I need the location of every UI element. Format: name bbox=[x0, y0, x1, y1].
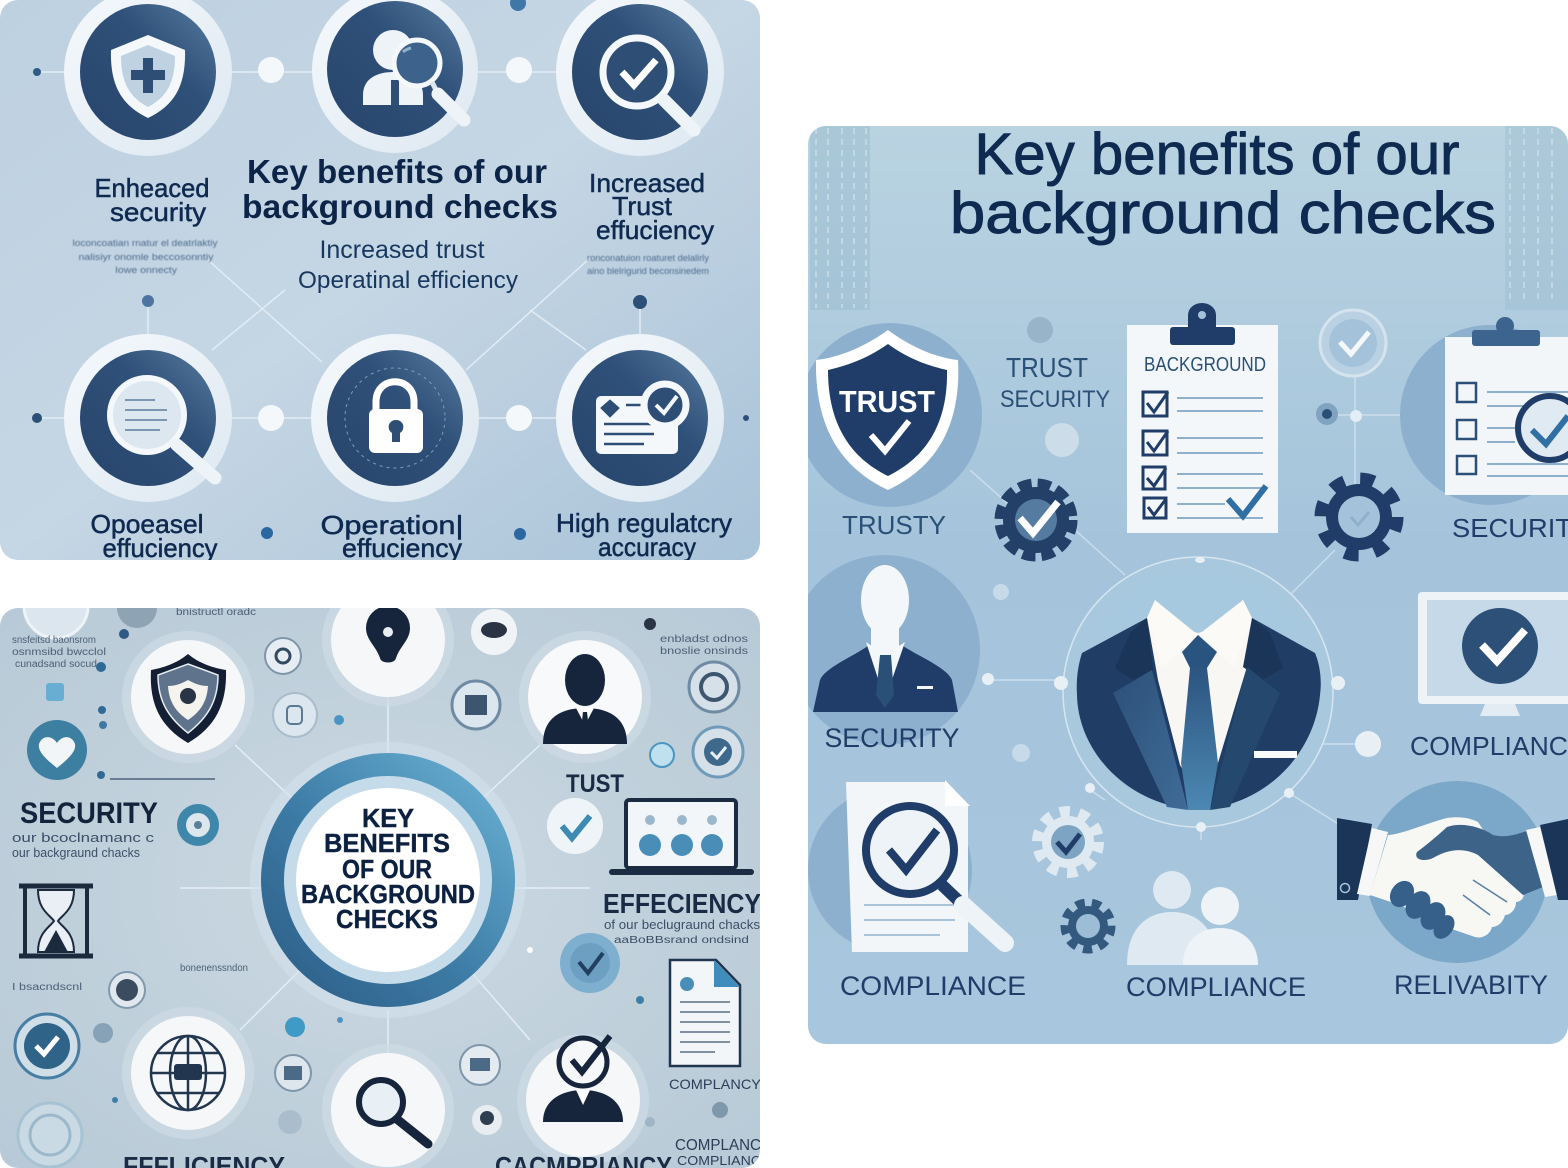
icon: shield badge bbox=[122, 631, 254, 763]
heading: efficiency: EFFECIENCY bbox=[603, 888, 761, 919]
title: key benefits bbox=[950, 122, 1496, 246]
label: operational efficiency middle: effuciency bbox=[342, 533, 462, 563]
icon: nodes bbox=[1316, 403, 1362, 425]
label: compliancy right: COMPLANCY bbox=[669, 1076, 762, 1092]
heading: key benefits bbox=[242, 153, 558, 225]
icon: hourglass bbox=[19, 886, 93, 956]
central hub: key benefits: BACKGROUND bbox=[301, 879, 475, 909]
label: enhanced security bbox=[96, 178, 208, 227]
small text: top captions: osnmsibd bwcclol bbox=[12, 647, 106, 658]
label: compliance right: COMPLIANC bbox=[1410, 731, 1568, 761]
icon: central connector nodes bbox=[982, 557, 1381, 832]
small text: left description: Iowe onnecty bbox=[115, 265, 178, 275]
icon: check bubble bbox=[547, 798, 603, 854]
small text: top captions: snsfeitsd baonsrom bbox=[12, 635, 96, 646]
label: high regulatory accuracy bbox=[558, 512, 732, 560]
icon: light check gear bbox=[1038, 812, 1098, 872]
small text: top captions: I bsacndscnl bbox=[12, 982, 82, 993]
label: operational efficiency left: effuciency bbox=[102, 533, 218, 563]
central hub: key benefits: OF OUR bbox=[342, 854, 432, 884]
label: high regulatory accuracy: accuracy bbox=[598, 532, 696, 562]
connector nodes bbox=[32, 0, 749, 540]
texture strips bbox=[810, 126, 1568, 310]
label: operational efficiency middle: Operation| bbox=[320, 510, 464, 540]
icon: businessman bbox=[790, 555, 980, 745]
central hub: key benefits: BENEFITS bbox=[324, 828, 450, 858]
small text: efficiency description: of our beclugraund chacks bbox=[604, 917, 761, 932]
icon: two people bbox=[1127, 871, 1258, 965]
label: compliancy right: COMPLIANC bbox=[677, 1153, 761, 1168]
small text: left description: nalisiyr onomle beccosonntiy bbox=[78, 252, 214, 262]
icon: document bbox=[670, 960, 740, 1066]
icon: blue gear bbox=[1065, 903, 1111, 949]
small text: left description bbox=[72, 238, 218, 275]
small text: left description: loconcoatian rnatur el deatrlaktiy bbox=[72, 238, 218, 248]
icon: check search badge bbox=[556, 0, 724, 156]
label: operational efficiency left bbox=[92, 514, 218, 560]
small text: top captions: bnoslie onsinds bbox=[660, 646, 748, 657]
icon: keyhole badge bbox=[322, 608, 454, 706]
icon: person with check badge bbox=[517, 1034, 649, 1166]
icon: heart circle bbox=[27, 720, 87, 780]
small text: top captions: cunadsand socud bbox=[15, 659, 97, 670]
icon: shield badge bbox=[64, 0, 232, 156]
icon: person badge bbox=[519, 631, 651, 763]
label: high regulatory accuracy: High regulatcry bbox=[556, 508, 732, 538]
central hub: key benefits: CHECKS bbox=[336, 904, 438, 934]
small text: efficiency description bbox=[604, 920, 760, 943]
panel: bottom left hub diagram bbox=[0, 574, 762, 1168]
label: increased trust efficiency: Increased bbox=[589, 168, 705, 198]
icon: central suit bbox=[1063, 557, 1333, 827]
icon: ID card and gear badge bbox=[556, 334, 724, 502]
icon: padlock badge bbox=[311, 334, 479, 502]
heading: trust: TUST bbox=[566, 770, 624, 798]
label: trust security: TRUST bbox=[1006, 352, 1088, 383]
label: security right: SECURIT bbox=[1452, 513, 1568, 543]
central hub: key benefits: KEY bbox=[362, 803, 414, 833]
scattered small icons bbox=[15, 574, 743, 1167]
icon: background clipboard: BACKGROUND bbox=[1144, 354, 1266, 376]
panel: right background check illustration bbox=[790, 122, 1568, 1044]
label: increased trust efficiency: effuciency bbox=[596, 215, 714, 245]
label: operational efficiency left: Opoeasel bbox=[90, 509, 204, 539]
label: reliability: RELIVABITY bbox=[1394, 970, 1548, 1000]
icon: background clipboard bbox=[1127, 303, 1278, 533]
heading: security: SECURITY bbox=[20, 797, 158, 830]
label: compliancy right bbox=[669, 1076, 762, 1168]
subheading: trust and efficiency bbox=[298, 236, 518, 294]
icon: document magnifier bbox=[808, 780, 1005, 952]
central hub: key benefits bbox=[250, 742, 526, 1018]
label: compliance left: COMPLIANCE bbox=[840, 971, 1026, 1001]
title: key benefits: background checks bbox=[950, 181, 1496, 246]
small text: efficiency description: aaBoBBsrand ondsind bbox=[614, 935, 749, 946]
icon: small check ring bbox=[1320, 310, 1386, 376]
small text: right description bbox=[587, 253, 710, 276]
icon: globe badge bbox=[122, 1007, 254, 1139]
small text: top captions: enbladst odnos bbox=[660, 634, 748, 645]
small text: top captions: bonenenssndon bbox=[180, 963, 248, 974]
small text: security description: our backgraund chacks bbox=[12, 845, 140, 860]
small text: security description bbox=[12, 832, 154, 860]
label: compliancy right: COMPLANC bbox=[675, 1137, 761, 1154]
subheading: trust and efficiency: Operatinal efficiency bbox=[298, 267, 518, 294]
icon: teal circle bbox=[177, 804, 219, 846]
heading: key benefits: Key benefits of our bbox=[247, 153, 547, 190]
heading: key benefits: background checks bbox=[242, 188, 558, 225]
icon: document search badge bbox=[64, 334, 232, 502]
icon: right clipboard bbox=[1400, 317, 1568, 505]
icon: magnifier badge bbox=[322, 1044, 454, 1168]
small text: right description: aino blelrigurid beconsinedem bbox=[587, 266, 709, 276]
small text: security description: our bcoclnamanc c bbox=[12, 830, 155, 845]
label: increased trust efficiency: Trust bbox=[612, 191, 673, 221]
icon: laptop bbox=[612, 800, 751, 872]
icon: faint badge and brain bbox=[1027, 317, 1079, 457]
small text: top captions bbox=[12, 607, 748, 993]
icon: monitor bbox=[1418, 592, 1568, 716]
label: enhanced security: Enheaced bbox=[94, 173, 210, 203]
icon: person search badge bbox=[312, 0, 478, 153]
label: increased trust efficiency bbox=[589, 168, 714, 245]
icon: navy gear bbox=[1321, 479, 1397, 555]
icon: check circle bbox=[560, 933, 620, 993]
label: trust security bbox=[1000, 352, 1110, 413]
icon: trust shield bbox=[798, 323, 982, 507]
subheading: trust and efficiency: Increased trust bbox=[320, 236, 485, 264]
small text: top captions: bnistructl oradc bbox=[176, 607, 256, 618]
label: security left: SECURITY bbox=[824, 723, 960, 753]
label: trust security: SECURITY bbox=[1000, 386, 1110, 413]
label: compliance center: COMPLIANCE bbox=[1126, 972, 1306, 1002]
icon: check gear bbox=[1000, 484, 1072, 556]
label: trusty: TRUSTY bbox=[842, 510, 946, 540]
icon: handshake bbox=[1337, 781, 1568, 963]
panel: top left benefits diagram bbox=[0, 0, 760, 563]
label: operational efficiency middle bbox=[322, 514, 462, 560]
icon: trust shield: TRUST bbox=[839, 384, 935, 419]
small text: right description: ronconatuion roaturet delalirly bbox=[587, 253, 710, 263]
label: enhanced security: security bbox=[110, 197, 206, 227]
title: key benefits: Key benefits of our bbox=[974, 122, 1460, 187]
